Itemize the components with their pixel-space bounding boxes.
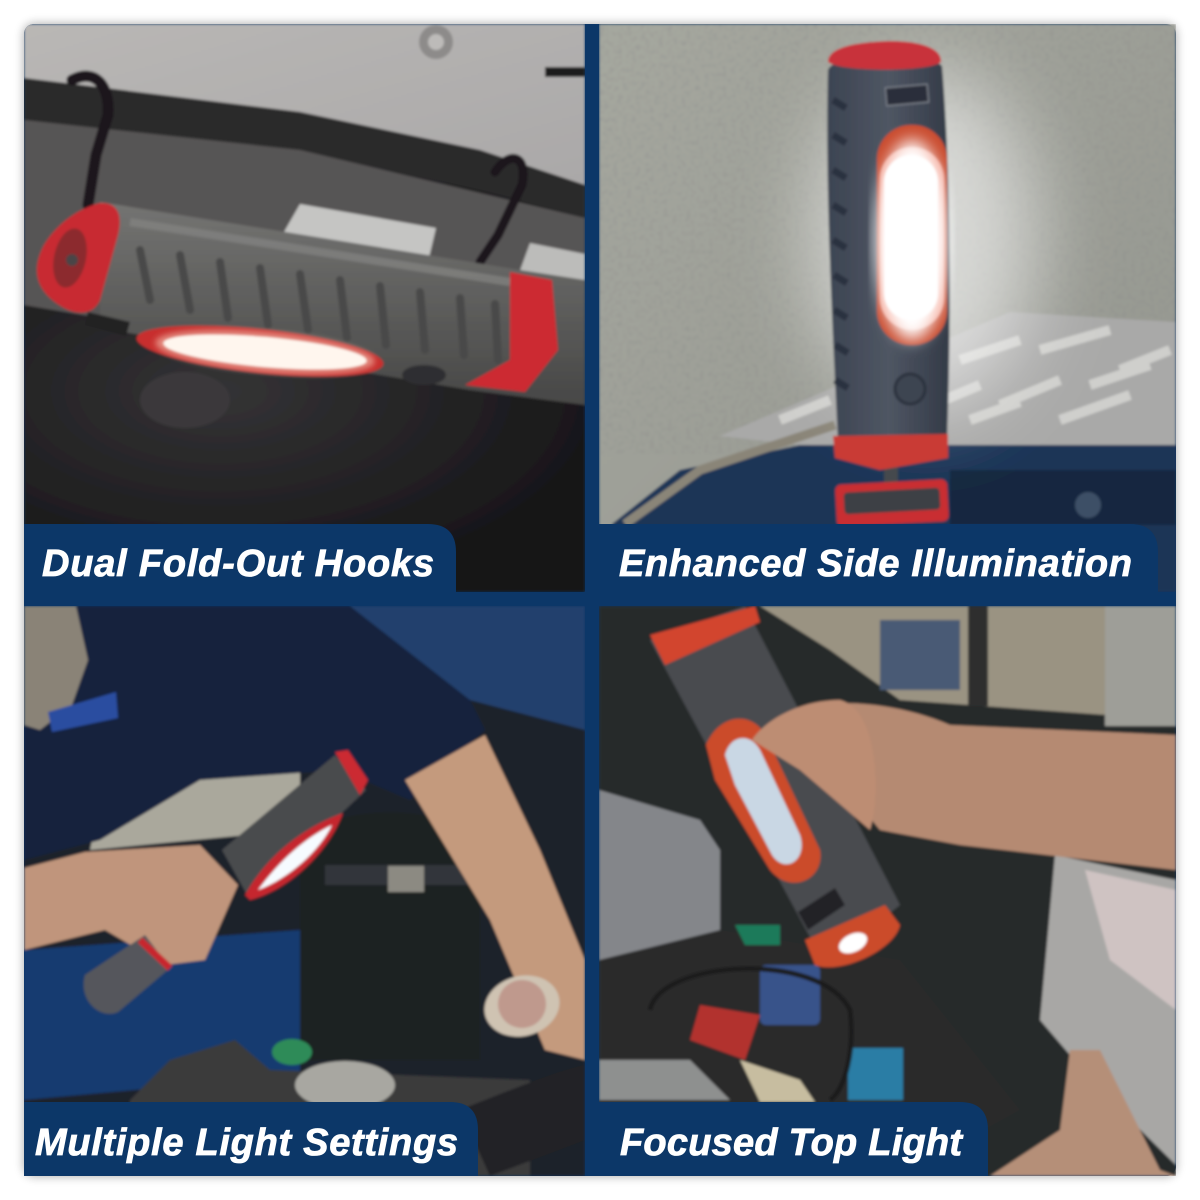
black canister	[300, 812, 480, 1060]
red bottom band	[833, 434, 948, 470]
bolt	[419, 25, 453, 59]
work light body	[650, 606, 900, 965]
power button	[895, 374, 925, 404]
label: enhanced side illumination: Enhanced Side Illumination	[619, 543, 1132, 585]
left arm and hand	[24, 845, 238, 965]
label: multiple light settings: Multiple Light Settings	[35, 1122, 458, 1164]
panel: enhanced side illumination	[599, 24, 1176, 592]
right arm	[405, 735, 585, 1060]
lens	[134, 324, 386, 379]
power button	[402, 365, 446, 385]
lens surround	[706, 719, 820, 883]
torch in hand	[222, 755, 366, 900]
sticker labels	[284, 204, 436, 262]
blue vehicle	[24, 930, 300, 1100]
background workshop	[759, 606, 1106, 717]
red top cap	[828, 41, 941, 70]
red end cap	[37, 203, 120, 313]
label: multiple light settings	[24, 1102, 478, 1176]
label: focused top light	[599, 1102, 988, 1176]
work light body	[100, 202, 585, 405]
blue vehicle	[612, 445, 1176, 592]
bottom red end	[805, 905, 900, 967]
beard	[24, 606, 88, 730]
light glow	[815, 70, 1035, 410]
hand over light	[752, 700, 876, 830]
work light body	[827, 54, 950, 442]
panel: focused top light	[599, 606, 1176, 1176]
red lens ring	[877, 125, 947, 345]
car roof panel	[24, 24, 585, 185]
background window	[340, 606, 585, 730]
tread plate	[720, 312, 1176, 445]
label: dual fold-out hooks	[24, 524, 585, 606]
engine bay	[599, 790, 720, 980]
logo on shirt	[48, 692, 118, 732]
badge	[798, 888, 845, 930]
label: dual fold-out hooks: Dual Fold-Out Hooks	[42, 543, 434, 585]
shirt	[24, 606, 485, 860]
badge	[85, 312, 130, 336]
label: enhanced side illumination	[599, 524, 1176, 606]
badge	[885, 84, 929, 106]
panel: dual fold-out hooks	[24, 24, 585, 592]
ribs	[833, 100, 848, 388]
headlight	[1040, 855, 1176, 1165]
engine parts	[130, 1040, 530, 1176]
panel: multiple light settings	[24, 606, 585, 1176]
hooks	[72, 76, 108, 205]
arm and hand	[848, 701, 1176, 872]
label: focused top light: Focused Top Light	[620, 1122, 963, 1164]
wall speckle	[599, 24, 1176, 454]
red collar	[465, 272, 558, 392]
swivel base	[882, 467, 900, 482]
